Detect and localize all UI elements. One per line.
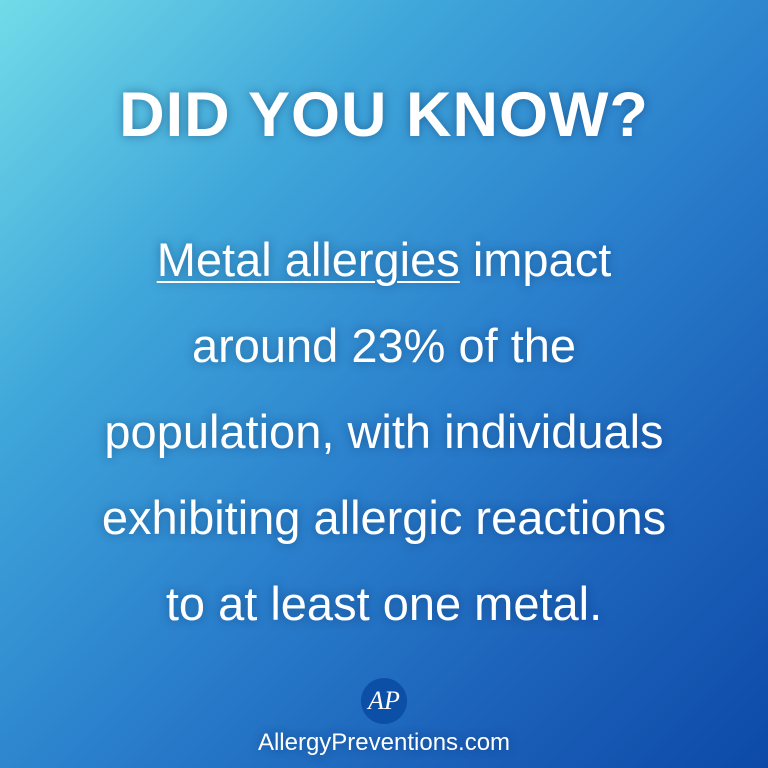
icon: AP logo: AP xyxy=(368,686,400,715)
body text: to at least one metal. xyxy=(166,577,602,630)
body text: exhibiting allergic reactions xyxy=(102,491,666,544)
body text xyxy=(100,233,666,630)
footer url: AllergyPreventions.com xyxy=(258,729,510,756)
title: DID YOU KNOW? xyxy=(119,80,649,150)
body text: population, with individuals xyxy=(104,405,664,458)
icon: AP logo xyxy=(361,678,407,724)
body text: around 23% of the xyxy=(192,319,576,372)
body text: Metal allergies impact xyxy=(157,233,611,286)
